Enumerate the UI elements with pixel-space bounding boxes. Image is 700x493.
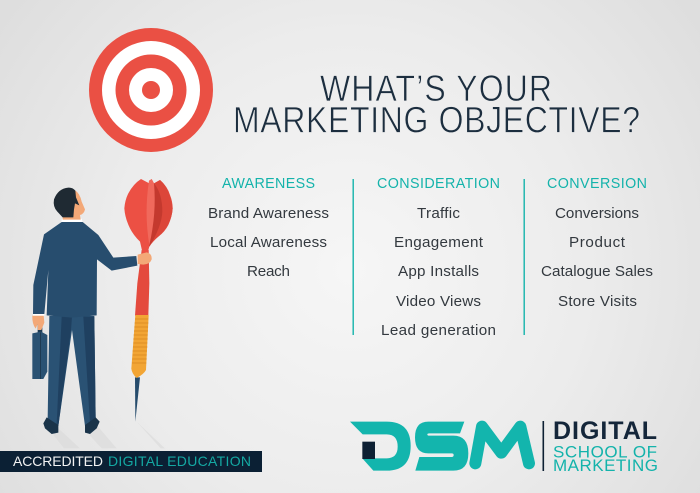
list: consideration objectives: Engagement (394, 234, 484, 251)
shoes (43, 417, 100, 434)
list: consideration objectives: App Installs (398, 263, 479, 280)
badge: accredited digital education: DIGITAL EDUCATION (108, 453, 251, 469)
divider: consideration and conversion (524, 179, 525, 335)
list: awareness objectives: Brand Awareness (208, 205, 329, 222)
left hand (32, 316, 44, 330)
icon: briefcase (32, 323, 47, 379)
badge: accredited digital education: ACCREDITED (13, 453, 103, 469)
logo wordmark: SCHOOL OF (553, 442, 657, 462)
heading: conversion: CONVERSION (547, 176, 647, 192)
title (233, 68, 640, 141)
trousers (48, 316, 96, 426)
list: consideration objectives: Lead generation (381, 322, 496, 339)
right hand gripping dart (138, 252, 152, 265)
shirt cuff and collar (33, 219, 83, 316)
logo: DSM Digital School of Marketing (350, 417, 658, 475)
list: conversion objectives: Product (569, 234, 626, 251)
logo wordmark: DIGITAL (553, 417, 657, 445)
list: awareness objectives: Reach (247, 263, 290, 280)
panel: awareness column (208, 176, 329, 280)
list: conversion objectives: Catalogue Sales (541, 263, 653, 280)
list: consideration objectives: Video Views (396, 293, 481, 310)
suit jacket (33, 222, 137, 318)
badge: accredited digital education (0, 451, 262, 472)
panel: consideration column (377, 176, 500, 339)
icon: giant dart (124, 179, 173, 422)
icon: red and white target (89, 28, 213, 152)
title: WHAT’S YOUR (320, 68, 552, 110)
head (54, 188, 85, 220)
logo wordmark (553, 417, 658, 475)
list: conversion objectives: Conversions (555, 205, 639, 222)
panel: conversion column (541, 176, 653, 310)
list: conversion objectives: Store Visits (558, 293, 637, 310)
floor shadows (53, 422, 165, 448)
divider: awareness and consideration (352, 179, 354, 335)
list: awareness objectives (208, 205, 329, 280)
list: consideration objectives (381, 205, 496, 339)
list: consideration objectives: Traffic (417, 205, 460, 222)
illustration: businessman holding a giant dart (32, 179, 173, 448)
title: MARKETING OBJECTIVE? (233, 99, 640, 141)
heading: awareness: AWARENESS (222, 176, 315, 192)
heading: consideration: CONSIDERATION (377, 176, 500, 192)
list: conversion objectives (541, 205, 653, 310)
logo divider (542, 421, 544, 471)
logo wordmark: MARKETING (553, 456, 658, 475)
logo mark: DSM (350, 422, 529, 471)
list: awareness objectives: Local Awareness (210, 234, 327, 251)
